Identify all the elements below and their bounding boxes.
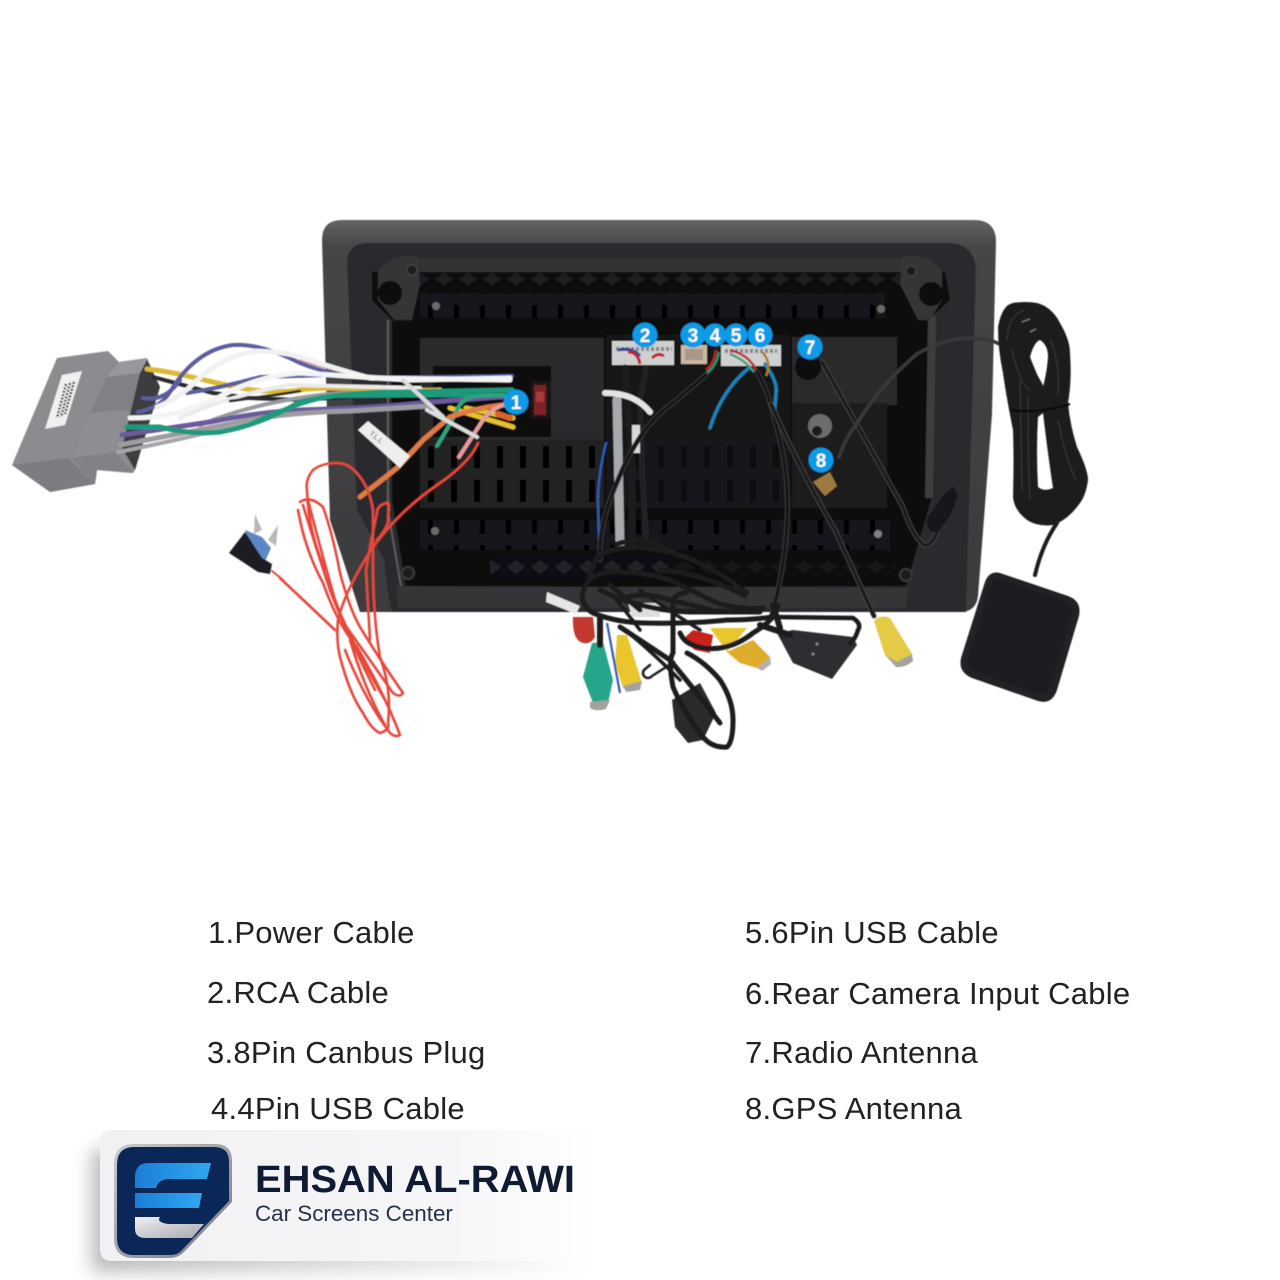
- GPS cable coil: [998, 302, 1088, 525]
- grey wiring connector: [12, 351, 160, 492]
- legend: left column: 2.RCA Cable: [207, 975, 389, 1010]
- USB female plug: [777, 630, 857, 679]
- badge 8: [808, 448, 834, 472]
- device back panel: [322, 220, 996, 612]
- badge 7: 7: [805, 338, 815, 359]
- logo panel: [92, 1130, 600, 1272]
- badge 5: [724, 324, 748, 347]
- logo icon: [114, 1144, 232, 1258]
- small wire labels at bottom: [546, 592, 660, 617]
- legend: left column: 3.8Pin Canbus Plug: [207, 1035, 486, 1070]
- GPS antenna block: [960, 572, 1080, 702]
- blue wire under bundle: [607, 623, 620, 693]
- legend: right column: [745, 915, 1130, 1126]
- gold GPS connector: [813, 472, 837, 496]
- black cables from ports: [600, 362, 937, 618]
- badge 3: [680, 322, 706, 348]
- badge 1: [504, 390, 528, 414]
- corner mounts and screws: [378, 256, 943, 581]
- GPS cable: [839, 338, 1057, 575]
- red accessory wire: [272, 443, 478, 736]
- badge 1: 1: [511, 393, 522, 414]
- legend: left column: [207, 915, 486, 1126]
- looped black cable bundle: [582, 540, 859, 747]
- thin colour wires at ports 4 and 5: [704, 350, 768, 376]
- power stub wires: [360, 380, 513, 497]
- badge 4: 4: [710, 326, 721, 347]
- legend: right column: 8.GPS Antenna: [745, 1091, 962, 1126]
- badge 4: [704, 324, 726, 347]
- legend: left column: 1.Power Cable: [208, 915, 415, 950]
- legend: right column: 7.Radio Antenna: [745, 1035, 979, 1070]
- badge 5: 5: [731, 326, 742, 347]
- blue wires: [710, 364, 776, 428]
- brand name: EHSAN AL-RAWI: [255, 1159, 575, 1201]
- top connectors: [612, 341, 781, 366]
- legend: right column: 5.6Pin USB Cable: [745, 915, 999, 950]
- yellow RCA rear camera plug: [874, 617, 913, 667]
- badge 6: 6: [755, 326, 765, 347]
- badge 2: 2: [640, 326, 650, 347]
- badge 3: 3: [688, 326, 698, 347]
- add-a-fuse tap: [229, 514, 278, 574]
- product photo: head unit with cables: [12, 220, 1088, 747]
- badge 6: [748, 322, 772, 348]
- RCA bundle below connector 2: [598, 368, 650, 545]
- legend: right column: 6.Rear Camera Input Cable: [745, 976, 1130, 1011]
- number badges: [504, 322, 834, 472]
- harness wires: [118, 345, 512, 452]
- badge 7: [798, 334, 822, 360]
- USB male plug: [672, 683, 716, 743]
- low connectors: RCA plugs: [573, 617, 771, 710]
- legend: left column: 4.4Pin USB Cable: [211, 1091, 465, 1126]
- radio antenna socket: [795, 354, 958, 532]
- fuse socket: [531, 381, 550, 418]
- white wire tag: T.L.L: [368, 430, 384, 445]
- white wire tag: [358, 421, 410, 468]
- badge 2: [632, 322, 658, 348]
- tagline: Car Screens Center: [255, 1201, 453, 1226]
- badge 8: 8: [816, 451, 826, 472]
